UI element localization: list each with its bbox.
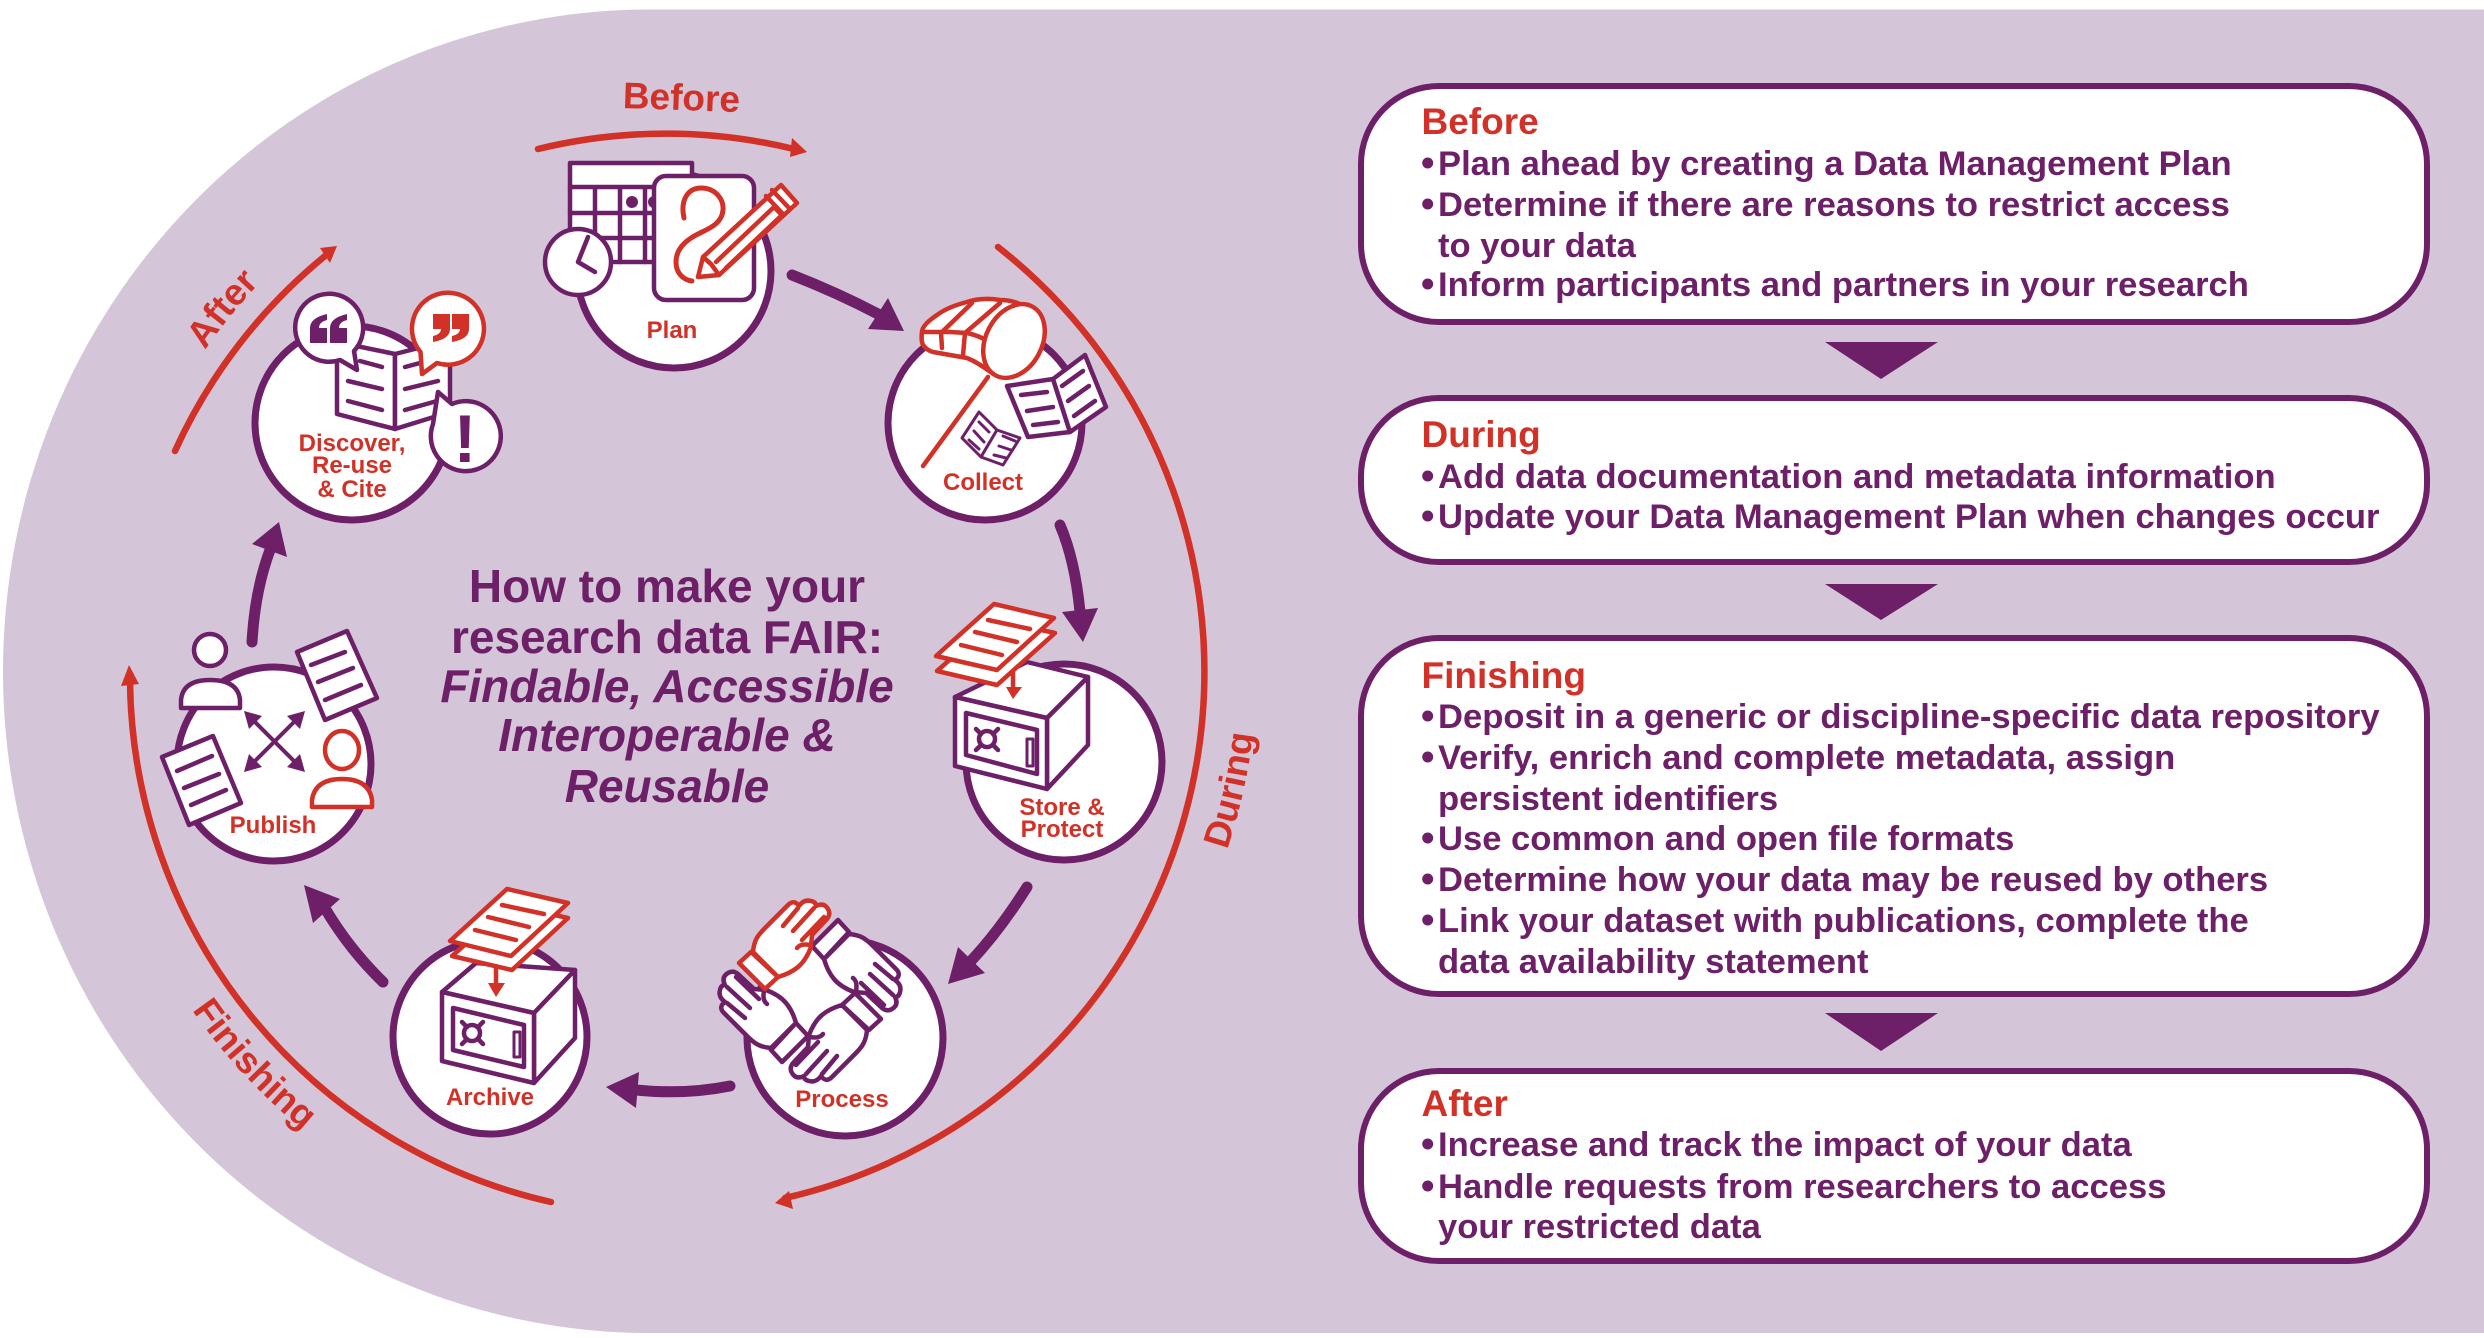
arrow: Before to During — [1825, 342, 1938, 379]
arrow: Publish to Discover — [252, 522, 287, 642]
bullets: Finishing: data availability statement — [1438, 943, 1869, 981]
icon: opening quote bubble — [295, 294, 363, 370]
phase arc: After — [172, 246, 337, 454]
title: How to make your — [469, 560, 865, 612]
label: Discover, Re-use and Cite — [299, 430, 405, 503]
phase arc: Finishing: Finishing — [193, 997, 314, 1132]
bullets: Finishing: Determine how your data may be reused by others — [1438, 861, 2268, 899]
panel: After — [1361, 1071, 2427, 1261]
bullets: Finishing: Deposit in a generic or discipline-specific data repository — [1438, 698, 2380, 736]
label: Store and Protect: Store & — [1019, 794, 1105, 821]
bullets: Before: Inform participants and partners in your research — [1438, 266, 2249, 304]
phase arc: During: During — [1204, 734, 1260, 848]
node: Process — [720, 901, 943, 1136]
arrow: Plan to Collect — [792, 275, 904, 331]
label: Archive: Archive — [446, 1084, 534, 1111]
hand: red top — [739, 901, 829, 989]
bullets: Finishing: Use common and open file formats — [1438, 820, 2014, 858]
node: Plan — [545, 163, 797, 368]
node: Discover, Re-use and Cite — [255, 293, 501, 520]
bullets: During — [1422, 458, 2380, 536]
heading: Before: Before — [1422, 101, 1539, 142]
hand: bottom — [791, 993, 881, 1081]
icon: safe — [955, 662, 1088, 789]
bullets: Finishing — [1422, 698, 2380, 981]
label: Discover, Re-use and Cite: & Cite — [317, 476, 387, 503]
icon: papers dropping — [450, 889, 568, 997]
bullets: Before: to your data — [1438, 227, 1637, 265]
icon: closing quote bubble — [412, 293, 484, 374]
icon: calendar — [570, 163, 692, 262]
panel: During — [1361, 398, 2427, 562]
label: Store and Protect: Protect — [1021, 816, 1103, 843]
arrow: Process to Archive — [606, 1072, 730, 1108]
label: Collect: Collect — [943, 469, 1023, 496]
title: Interoperable & — [498, 709, 836, 761]
bullets: Finishing: Verify, enrich and complete metadata, assign — [1438, 739, 2175, 777]
heading: Finishing: Finishing — [1422, 655, 1586, 696]
bullets: Before — [1422, 145, 2249, 304]
arrow: Collect to Store — [1060, 525, 1098, 642]
phase arc: Finishing — [121, 665, 554, 1206]
bullets: Before: Determine if there are reasons to restrict access — [1438, 186, 2230, 224]
bullets: Finishing: persistent identifiers — [1438, 780, 1778, 818]
node: Store and Protect — [936, 604, 1162, 860]
bullets: During: Update your Data Management Plan when changes occur — [1438, 498, 2380, 536]
label: Discover, Re-use and Cite: Discover, — [299, 430, 405, 457]
bullets: Before: Plan ahead by creating a Data Management Plan — [1438, 145, 2232, 183]
icon: open book — [337, 340, 450, 429]
label: Discover, Re-use and Cite: Re-use — [312, 452, 392, 479]
label: Process: Process — [795, 1086, 889, 1113]
icon: document top right — [297, 631, 377, 720]
icon: net — [922, 293, 1057, 466]
arrow: Archive to Publish — [304, 885, 383, 982]
node: Archive — [393, 889, 587, 1134]
title — [440, 560, 894, 812]
icon: document bottom left — [162, 736, 241, 825]
bullets: After: Handle requests from researchers to access — [1438, 1168, 2166, 1206]
label: Plan: Plan — [647, 317, 697, 344]
node: Collect — [888, 293, 1106, 520]
arrow: During to Finishing — [1825, 584, 1938, 620]
icon: person red — [312, 731, 372, 807]
icon: safe — [442, 963, 575, 1083]
icon: exclamation bubble: ! — [454, 401, 476, 477]
bullets: After: Increase and track the impact of your data — [1438, 1126, 2132, 1164]
arrow: Store to Process — [948, 887, 1027, 984]
title: Findable, Accessible — [440, 660, 894, 712]
heading: After: After — [1422, 1083, 1508, 1124]
icon: notepad with squiggle and pencil — [654, 176, 797, 300]
label: Store and Protect — [1019, 794, 1105, 843]
panel: Finishing — [1361, 638, 2427, 994]
hand: top right — [812, 920, 900, 1010]
title: research data FAIR: — [451, 611, 883, 663]
icon: papers dropping — [936, 604, 1055, 699]
bullets: During: Add data documentation and metadata information — [1438, 458, 2276, 496]
bullets: After — [1422, 1126, 2166, 1246]
arrow: Finishing to After — [1825, 1013, 1938, 1051]
icon: large open book — [1007, 355, 1106, 437]
icon: small open book — [962, 412, 1020, 465]
node: Publish — [162, 631, 377, 861]
label: Publish: Publish — [230, 812, 316, 839]
panel: Before — [1361, 86, 2427, 322]
icon: four linked hands — [720, 901, 900, 1081]
bullets: After: your restricted data — [1438, 1208, 1762, 1246]
phase arc: After: After — [190, 270, 255, 350]
icon: exclamation bubble — [431, 392, 501, 477]
heading: During: During — [1422, 414, 1541, 455]
hand: left — [720, 972, 808, 1062]
title: Reusable — [565, 760, 769, 812]
icon: clock — [545, 229, 611, 295]
phase arc: During — [775, 244, 1260, 1209]
icon: exchange arrows — [244, 711, 305, 772]
phase arc: Before: Before — [622, 75, 741, 120]
bullets: Finishing: Link your dataset with publications, complete the — [1438, 902, 2249, 940]
icon: person purple — [181, 634, 240, 708]
phase arc: Before — [538, 75, 807, 157]
